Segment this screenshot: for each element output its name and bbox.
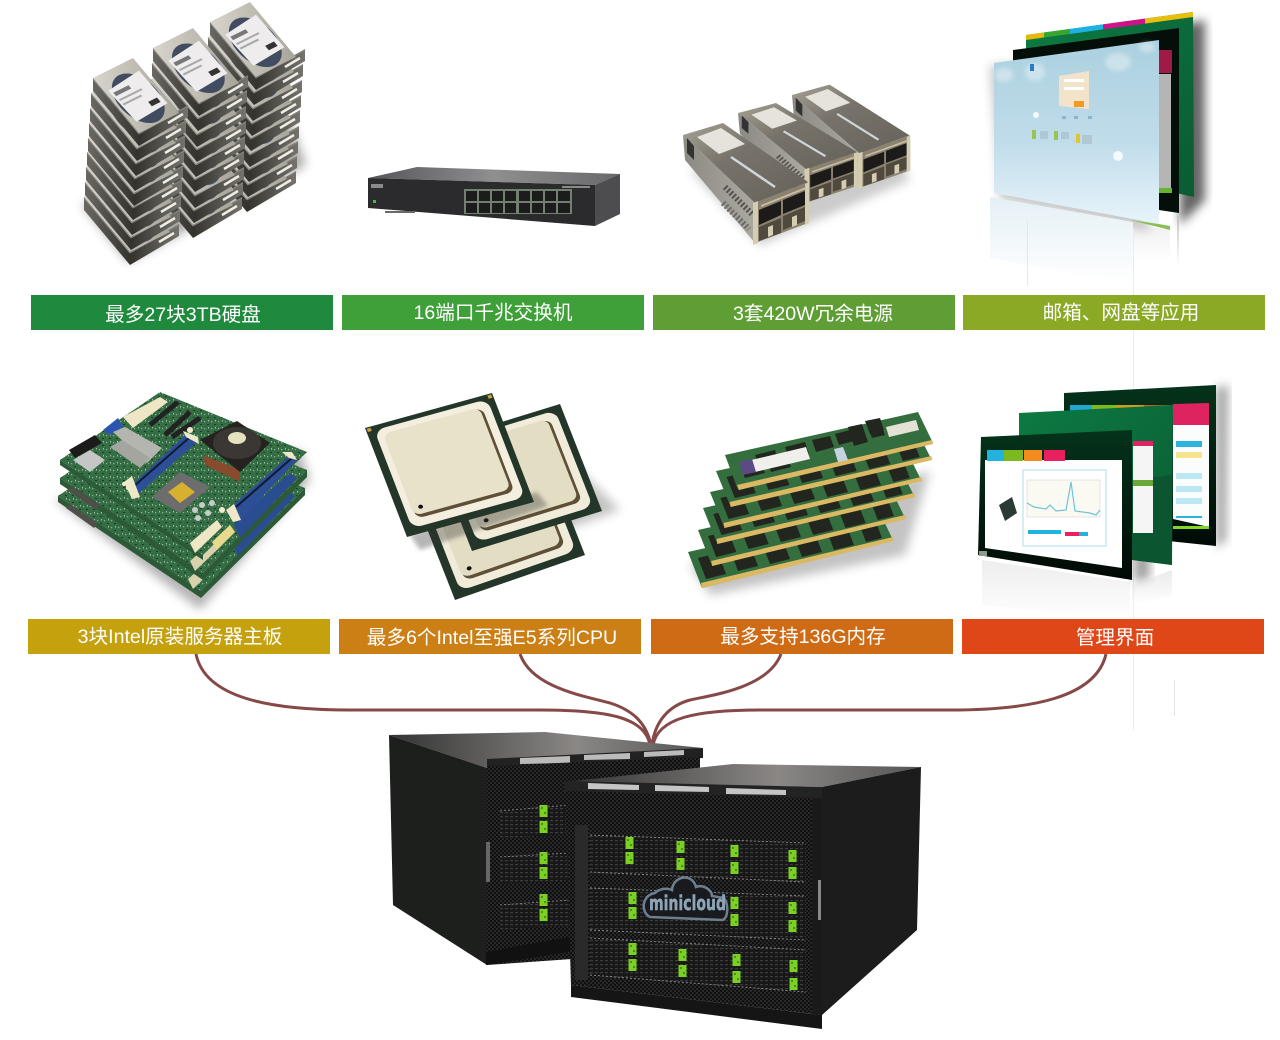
connectors: component curves to server	[196, 654, 1106, 745]
image: rear server unit	[389, 732, 703, 965]
label: 27 hard drives	[31, 295, 333, 330]
label: management UI	[962, 619, 1264, 654]
label: applications	[963, 295, 1265, 330]
label: CPUs	[339, 619, 641, 654]
label: management UI: 管理界面	[1076, 627, 1154, 649]
reflection under management screens	[982, 560, 1172, 620]
image: six RAM modules	[688, 412, 933, 595]
label: memory	[651, 619, 953, 654]
image: three Xeon CPUs	[365, 393, 620, 600]
image: front server unit	[564, 764, 921, 1029]
label: memory: 最多支持136G内存	[720, 626, 886, 648]
label: power supplies	[653, 295, 955, 330]
label: motherboards	[28, 619, 330, 654]
label: motherboards: 3块Intel原装服务器主板	[78, 626, 282, 648]
label: 16-port switch	[342, 295, 644, 330]
image: three redundant power supplies	[683, 85, 910, 245]
label: CPUs: 最多6个Intel至强E5系列CPU	[367, 627, 617, 649]
label: 27 hard drives: 最多27块3TB硬盘	[105, 304, 261, 326]
reflection under app screens	[990, 197, 1179, 730]
image: stacked motherboards	[55, 392, 310, 610]
label: power supplies: 3套420W冗余电源	[733, 303, 893, 325]
image: stack of 27 hard drives	[82, 2, 306, 265]
image: network switch	[368, 167, 620, 226]
logo: minicloud: minicloud	[649, 891, 726, 915]
label: 16-port switch: 16端口千兆交换机	[414, 302, 573, 324]
image: management console screens	[978, 385, 1228, 582]
image: mail and storage app screens	[990, 12, 1205, 232]
logo: minicloud	[644, 877, 727, 920]
label: applications: 邮箱、网盘等应用	[1043, 302, 1199, 324]
